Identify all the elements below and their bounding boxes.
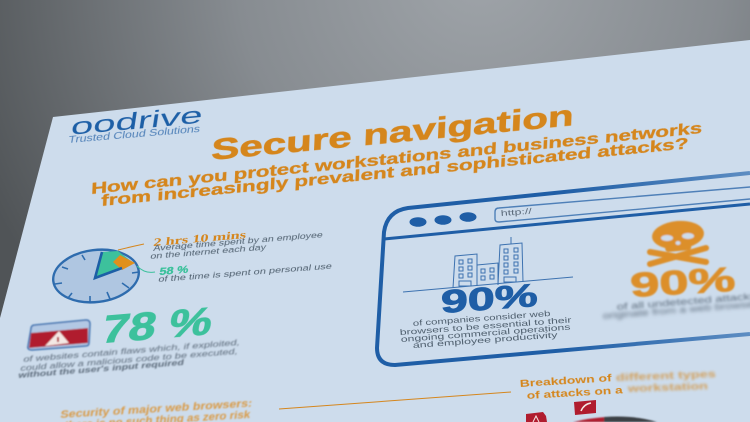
icon: office buildings bbox=[453, 237, 523, 288]
icon: pdf attacks bbox=[526, 412, 547, 422]
breakdown heading bbox=[519, 369, 717, 402]
teal pie wedge bbox=[95, 251, 132, 278]
heading line 2, blurred part: workstation bbox=[626, 381, 708, 395]
stat description: time online: Average time spent by an employee bbox=[153, 230, 324, 253]
heading line 1: Security of major web browsers: bbox=[60, 398, 253, 421]
section divider line bbox=[279, 392, 511, 409]
78 % figure: 78 % bbox=[98, 300, 216, 352]
stat: 2 hrs 10 mins: 2 hrs 10 mins bbox=[153, 229, 248, 249]
undetected attacks description line 2: originate from a web browser bbox=[602, 299, 750, 321]
browser header line bbox=[384, 204, 750, 239]
heading line 1, blurred part: different types bbox=[616, 369, 717, 384]
logo tagline: Trusted Cloud Solutions bbox=[68, 124, 201, 146]
clock statistic bbox=[50, 229, 333, 307]
subtitle bbox=[91, 120, 703, 210]
description line 1: of companies consider web bbox=[412, 309, 552, 328]
90 % blue figure: 90% bbox=[441, 277, 538, 320]
browser window panel bbox=[377, 173, 750, 365]
orange pie wedge bbox=[113, 255, 135, 270]
undetected attacks description line 1: of all undetected attacks bbox=[616, 291, 750, 312]
stat: 58 %: 58 % bbox=[159, 265, 189, 278]
clock hands bbox=[95, 252, 122, 278]
browser frame bbox=[377, 173, 750, 365]
description line 2: could allow a malicious code to be executed, bbox=[20, 347, 239, 373]
address bar bbox=[495, 187, 750, 222]
description line 1: of websites contain flaws which, if exploited, bbox=[23, 338, 241, 364]
address text: http:// bbox=[500, 206, 533, 218]
icon: flash attacks bbox=[574, 400, 596, 415]
description line 2: browsers to be essential to their bbox=[399, 315, 572, 337]
icon: clock bbox=[50, 245, 142, 307]
donut chart top edge bbox=[573, 417, 657, 422]
ground line bbox=[403, 277, 573, 292]
icon: skull and crossbones bbox=[650, 219, 706, 264]
icon: browser warning bbox=[28, 320, 90, 350]
90 % orange figure: 90% bbox=[629, 261, 736, 305]
heading line 2, sharp part: of attacks on a bbox=[527, 385, 624, 402]
description line 3: without the user's input required bbox=[16, 358, 185, 380]
stat description: personal use: of the time is spent on personal use bbox=[158, 262, 333, 284]
statistic: 78 percent bbox=[16, 300, 241, 380]
heading line 1, sharp part: Breakdown of bbox=[519, 373, 613, 390]
teal leader line bbox=[137, 266, 155, 272]
stat description line 2: on the internet each day bbox=[150, 243, 268, 261]
description line 3: ongoing commercial operations bbox=[400, 323, 571, 344]
description line 4: and employee productivity bbox=[412, 330, 558, 350]
title: Secure navigation bbox=[211, 100, 574, 167]
logo wordmark: oodrive bbox=[69, 102, 205, 140]
orange leader line bbox=[118, 244, 144, 250]
window control dots bbox=[410, 212, 476, 227]
logo bbox=[68, 102, 205, 146]
subtitle line 1: How can you protect workstations and business networks bbox=[91, 120, 703, 198]
subtitle line 2: from increasingly prevalent and sophisticated attacks? bbox=[101, 135, 689, 210]
bottom left heading bbox=[60, 398, 253, 422]
companies description bbox=[399, 309, 572, 350]
